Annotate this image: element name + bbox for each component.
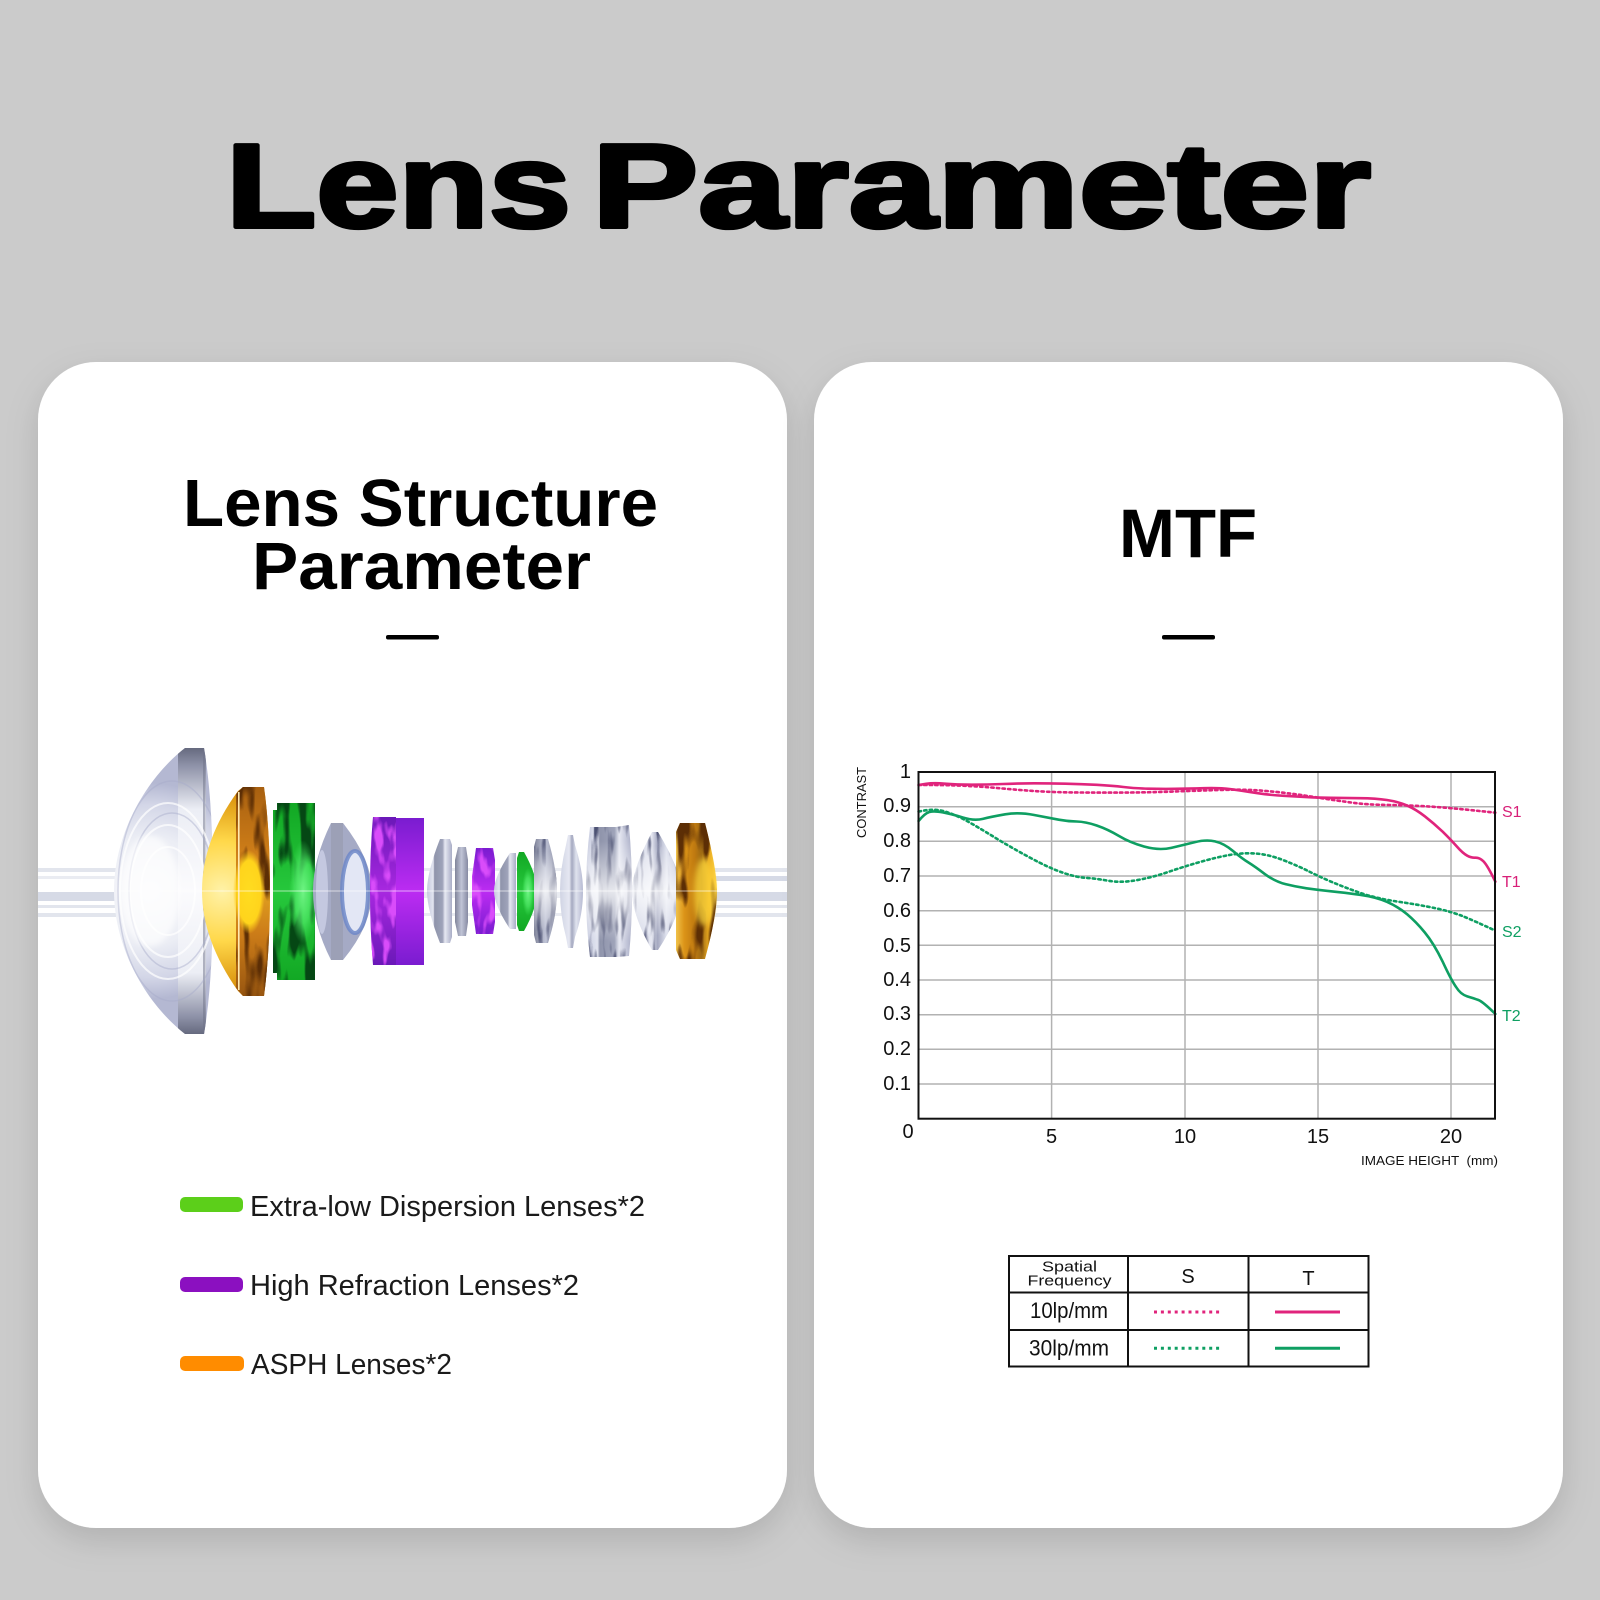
lens element 8: high refraction purple xyxy=(472,848,495,934)
lens element 15: ASPH amber xyxy=(676,823,717,959)
lens element 7: clear xyxy=(455,847,468,936)
curve labels: T1 xyxy=(1502,874,1521,891)
y axis title: CONTRAST xyxy=(854,767,869,838)
y axis labels xyxy=(883,761,911,1095)
spatial frequency table xyxy=(1009,1256,1368,1366)
title: Lens xyxy=(226,120,571,253)
heading: MTF: MTF xyxy=(1119,495,1257,572)
heading dash xyxy=(386,635,439,640)
legend line: S 30lp/mm xyxy=(1154,1347,1220,1350)
y axis labels: 0.3 xyxy=(883,1003,911,1025)
y axis labels: 1 xyxy=(900,761,911,783)
x axis labels: 20 xyxy=(1440,1126,1462,1148)
lens element 6: clear xyxy=(427,839,452,943)
lens diagram xyxy=(38,745,787,1037)
y axis labels: 0.7 xyxy=(883,865,911,887)
lens element 14: clear biconvex xyxy=(632,832,681,950)
lens element 5: high refraction purple xyxy=(370,817,424,965)
curve T2: 30lp/mm tangential xyxy=(919,811,1495,1014)
heading: lens structure parameter xyxy=(183,466,658,604)
legend line: S 10lp/mm xyxy=(1154,1310,1220,1314)
lens element 9: clear xyxy=(494,853,516,929)
header: T: T xyxy=(1302,1268,1315,1290)
lens element 13: clear wide xyxy=(586,825,632,957)
y axis labels: 0.2 xyxy=(883,1038,911,1060)
y axis labels: 0.6 xyxy=(883,900,911,922)
title: Parameter xyxy=(592,120,1371,253)
legend line: T 10lp/mm xyxy=(1275,1310,1340,1314)
curve labels: S1 xyxy=(1502,804,1522,821)
row label: 30lp/mm: 30lp/mm xyxy=(1029,1336,1109,1360)
curve labels: S2 xyxy=(1502,924,1522,941)
y axis labels: 0.9 xyxy=(883,795,911,817)
lens element 3: extra-low dispersion green xyxy=(273,803,317,980)
panel: MTF xyxy=(814,362,1563,1528)
header: S: S xyxy=(1181,1266,1195,1288)
lens element 2: ASPH amber xyxy=(202,787,270,996)
x axis labels: 10 xyxy=(1174,1126,1196,1148)
central light streak xyxy=(120,890,720,892)
header: spatial frequency xyxy=(1028,1258,1112,1290)
x axis labels: 15 xyxy=(1307,1126,1329,1148)
header: spatial frequency: Spatial xyxy=(1042,1258,1097,1276)
x axis labels: 5 xyxy=(1046,1126,1057,1148)
curve S1: 10lp/mm sagittal xyxy=(919,785,1495,813)
curve S2: 30lp/mm sagittal xyxy=(919,810,1495,931)
lens element 4: clear biconvex xyxy=(313,823,372,960)
title xyxy=(226,120,1371,253)
lens element 10: extra-low dispersion green xyxy=(517,852,537,931)
MTF chart xyxy=(854,761,1522,1168)
header: spatial frequency: Frequency xyxy=(1028,1272,1112,1290)
panel: lens structure xyxy=(38,362,787,1528)
curve labels: T2 xyxy=(1502,1008,1521,1025)
y axis labels: 0.1 xyxy=(883,1073,911,1095)
legend item: extra-low dispersion: Extra-low Dispersion Lenses*2 xyxy=(250,1191,645,1223)
legend item: high refraction: High Refraction Lenses*2 xyxy=(250,1270,579,1302)
lens element 1: front clear xyxy=(114,748,212,1034)
x axis title: IMAGE HEIGHT (mm) xyxy=(1361,1153,1498,1168)
row label: 10lp/mm: 10lp/mm xyxy=(1030,1298,1108,1323)
lens element 12: clear xyxy=(560,835,583,948)
y axis labels: 0.5 xyxy=(883,935,911,957)
x axis labels: 0 xyxy=(902,1121,914,1143)
table grid xyxy=(1009,1256,1368,1366)
lens element 11: clear xyxy=(534,839,557,943)
legend item: ASPH: ASPH Lenses*2 xyxy=(251,1349,452,1381)
curve T1: 10lp/mm tangential xyxy=(919,783,1495,882)
legend xyxy=(180,1191,645,1381)
heading dash xyxy=(1162,635,1215,640)
grid lines xyxy=(918,772,1495,1119)
y axis labels: 0.8 xyxy=(883,830,911,852)
heading: lens structure parameter: Lens Structure xyxy=(183,466,658,541)
curve labels xyxy=(1502,804,1522,1025)
y axis labels: 0.4 xyxy=(883,969,911,991)
light beams xyxy=(38,868,787,917)
heading: lens structure parameter: Parameter xyxy=(252,529,591,604)
x axis labels xyxy=(902,1121,1462,1148)
chart frame xyxy=(918,772,1495,1119)
legend line: T 30lp/mm xyxy=(1275,1347,1340,1350)
